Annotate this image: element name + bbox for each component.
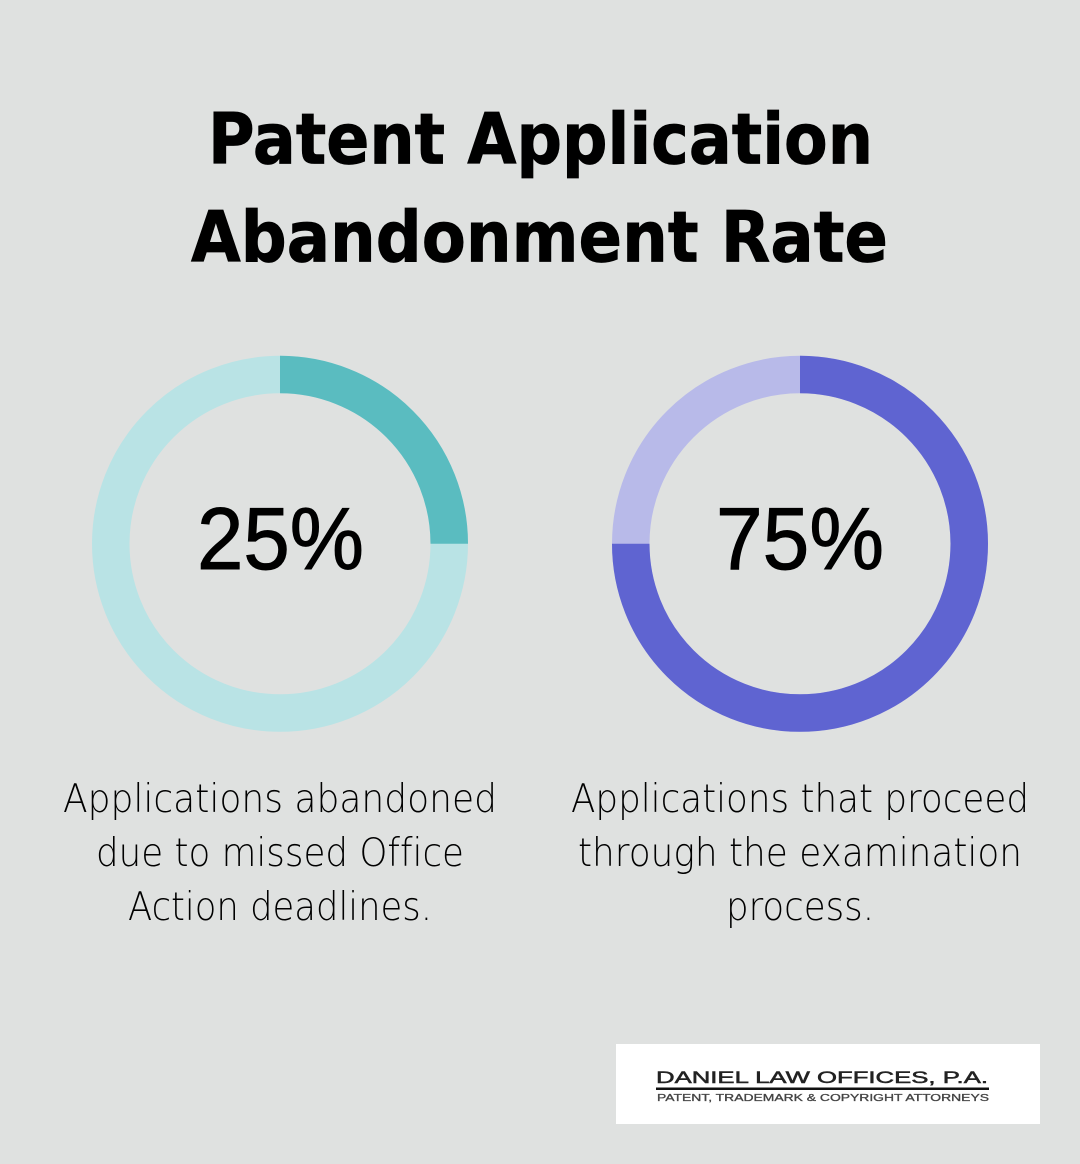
stat: 75%: 75% bbox=[716, 489, 884, 588]
caption: proceeding applications: through the examination bbox=[578, 831, 1022, 876]
logo: Daniel Law Offices: PATENT, TRADEMARK & COPYRIGHT ATTORNEYS bbox=[657, 1093, 989, 1104]
title bbox=[191, 98, 888, 278]
panel: 25 percent abandoned bbox=[63, 375, 497, 930]
caption: abandoned applications bbox=[63, 777, 497, 930]
logo: Daniel Law Offices bbox=[616, 1044, 1040, 1124]
donut chart: 25% bbox=[111, 375, 449, 713]
caption: proceeding applications bbox=[571, 777, 1029, 930]
title: Patent Application bbox=[208, 98, 873, 180]
title: Abandonment Rate bbox=[191, 196, 888, 278]
donut chart: 75% bbox=[631, 375, 969, 713]
caption: proceeding applications: Applications that proceed bbox=[571, 777, 1029, 822]
caption: abandoned applications: Action deadlines. bbox=[128, 885, 432, 930]
caption: abandoned applications: due to missed Office bbox=[96, 831, 464, 876]
caption: abandoned applications: Applications abandoned bbox=[63, 777, 497, 822]
panel: 75 percent proceed bbox=[571, 375, 1029, 930]
logo: Daniel Law Offices: DANIEL LAW OFFICES, P.A. bbox=[656, 1068, 988, 1087]
caption: proceeding applications: process. bbox=[726, 885, 874, 930]
stat: 25%: 25% bbox=[197, 489, 364, 588]
